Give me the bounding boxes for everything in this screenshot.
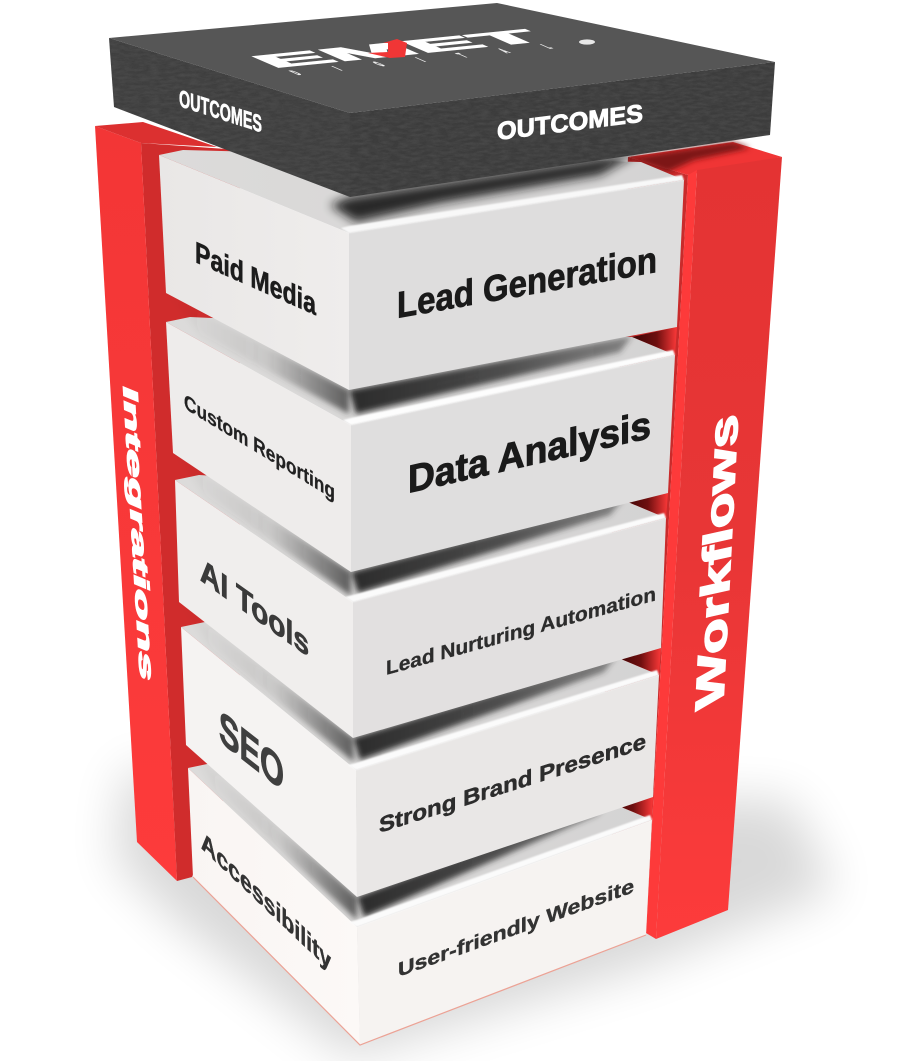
label: Integrations: Integrations (118, 382, 159, 686)
left face (188, 768, 360, 1045)
block 4: SEO / Strong Brand Presence (179, 602, 661, 897)
left face (175, 480, 353, 738)
shadow from block above (349, 336, 632, 414)
text: User-friendly Website: User-friendly Website (398, 875, 634, 982)
block 5: Accessibility / User-friendly Website (186, 745, 653, 1045)
right face (353, 518, 666, 738)
pillar outer face (95, 126, 177, 881)
logo: EMET DIGITAL (240, 26, 595, 77)
left face (166, 322, 351, 572)
gap behind block (616, 648, 661, 675)
panel: top slab OUTCOMES (109, 3, 775, 197)
text: AI Tools: AI Tools (200, 551, 309, 665)
text: Lead Nurturing Automation: Lead Nurturing Automation (386, 584, 656, 680)
top face (175, 475, 666, 602)
pillar front face (656, 157, 782, 939)
gap behind block (609, 797, 653, 820)
soft shadow on left of top face (186, 745, 357, 920)
gap behind block (632, 327, 677, 355)
right face (349, 180, 684, 390)
soft shadow on left of top face (166, 293, 349, 414)
text: Accessibility: Accessibility (201, 825, 331, 978)
shadow from block above (357, 800, 609, 917)
text: SEO: SEO (219, 700, 284, 802)
gap behind block (623, 493, 668, 518)
bottom edge glow (193, 877, 646, 1045)
text: Data Analysis: Data Analysis (408, 403, 651, 502)
block 3: AI Tools / Lead Nurturing Automation (173, 453, 668, 738)
pillar inner dark face (600, 157, 688, 933)
logo wordmark: EMET (240, 26, 560, 72)
slab left side (109, 38, 350, 197)
block 1: Paid Media / Lead Generation (159, 150, 684, 390)
left face (181, 627, 357, 897)
top face (159, 150, 684, 233)
left face (159, 155, 349, 390)
label: OUTCOMES left: OUTCOMES (179, 86, 262, 138)
right face (356, 675, 659, 897)
ground shadow (115, 770, 835, 1058)
panel: right red pillar (600, 142, 782, 939)
text: Custom Reporting: Custom Reporting (184, 389, 335, 505)
top face (166, 317, 675, 425)
right face (351, 355, 675, 572)
panel: left red pillar (95, 122, 240, 881)
block 2: Custom Reporting / Data Analysis (166, 293, 677, 572)
pillar top (628, 142, 782, 175)
top bevel (349, 815, 652, 927)
text: Lead Generation: Lead Generation (397, 238, 657, 326)
shadow from block above (353, 656, 616, 760)
shadow from block above (351, 499, 623, 593)
pillar bright strip (646, 170, 697, 939)
logo red accent (368, 39, 407, 58)
label: OUTCOMES right: OUTCOMES (497, 100, 643, 146)
slab shadow on pillar top (627, 142, 750, 172)
top bevel (343, 350, 675, 425)
slab right side (350, 62, 775, 197)
top face (181, 622, 659, 770)
shadow under top slab (330, 152, 640, 222)
soft shadow on left of top face (173, 453, 351, 596)
top bevel (341, 175, 684, 233)
label: Workflows: Workflows (686, 411, 747, 713)
text: Paid Media: Paid Media (195, 235, 316, 322)
logo registered mark (579, 39, 595, 45)
pillar top (95, 122, 217, 147)
pillar inner dark face (141, 143, 240, 881)
slab top face (109, 3, 775, 113)
top bevel (345, 513, 666, 602)
logo subtitle: DIGITAL (287, 44, 557, 77)
top face (188, 763, 652, 927)
soft shadow on left of top face (179, 602, 354, 762)
top bevel (348, 670, 659, 770)
right face (357, 820, 652, 1045)
text: Strong Brand Presence: Strong Brand Presence (379, 729, 646, 838)
